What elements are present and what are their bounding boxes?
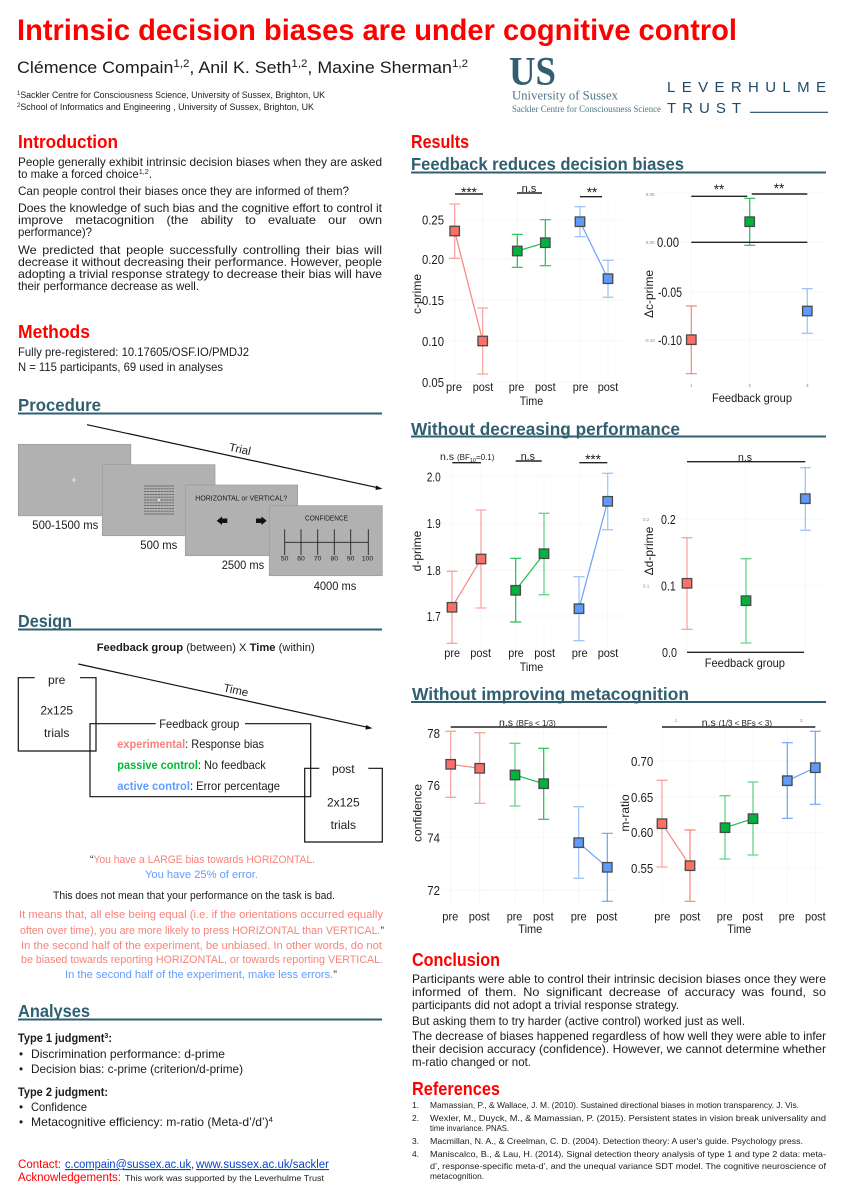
chart: delta d-prime by group: 0.0 [662, 645, 677, 660]
chart: delta c-prime by group: -0.10 [658, 332, 682, 348]
heading: without improving metacognition: Without improving metacognition [412, 684, 689, 704]
chart: confidence pre vs post: pre [571, 910, 587, 924]
chart: d-prime pre vs post: n.s (BF [440, 451, 470, 463]
text: reference list [412, 1100, 827, 1181]
chart: c-prime pre vs post: 0.05 [422, 375, 444, 390]
chart: c-prime pre vs post: n.s [522, 183, 537, 195]
text: feedback wording: “You have a LARGE bias towards HORIZONTAL. [90, 854, 315, 866]
text: contact: www.sussex.ac.uk/sackler [195, 1159, 329, 1171]
text: acknowledgements: Acknowledgements: [18, 1172, 121, 1184]
logo: Leverhulme Trust: TRUST [667, 100, 741, 117]
heading: analyses: Analyses [18, 1001, 90, 1021]
chart: confidence pre vs post: pre [507, 910, 523, 924]
text: feedback wording: be biased towards reporting HORIZONTAL, or towards reporting VERTICAL. [21, 954, 383, 966]
text: type 1 judgment: : [108, 1032, 112, 1045]
text: feedback wording: This does not mean that your performance on the task is bad. [53, 890, 335, 902]
text: methods body: Fully pre-registered: 10.17605/OSF.IO/PMDJ2 [18, 346, 249, 359]
screen: stimulus [102, 465, 215, 552]
chart: m-ratio pre vs post: 0.60 [631, 825, 653, 840]
text: type 1 judgment: Discrimination performance: d-prime [31, 1048, 225, 1061]
chart: m-ratio pre vs post: 3 [800, 718, 803, 723]
chart: c-prime pre vs post: 0.10 [422, 334, 444, 349]
chart: confidence pre vs post: post [596, 910, 618, 924]
text: type 1 judgment: 3 [104, 1031, 108, 1040]
chart: d-prime pre vs post: post [598, 646, 619, 660]
screen: confidence scale: CONFIDENCE [305, 516, 348, 522]
chart: m-ratio pre vs post: 0.65 [631, 790, 653, 805]
chart: delta c-prime by group: 1 [690, 383, 693, 388]
chart: d-prime pre vs post: pre [572, 646, 588, 660]
heading: conclusion: Conclusion [412, 950, 500, 970]
text: feedback wording: In the second half of the experiment, make less errors.” [65, 969, 337, 981]
chart: delta d-prime by group [642, 452, 826, 670]
heading: introduction: Introduction [18, 132, 118, 152]
heading: references: References [412, 1079, 500, 1099]
affiliations: 2 [17, 103, 21, 109]
chart: delta c-prime by group: -0.10 [644, 338, 655, 343]
affiliations: Sackler Centre for Consciousness Science, University of Sussex, Brighton, UK [20, 90, 325, 100]
chart: confidence pre vs post: 76 [427, 778, 440, 793]
text: type 2 judgment [18, 1086, 273, 1129]
chart: d-prime pre vs post: post [534, 646, 556, 660]
chart: confidence pre vs post: 72 [427, 883, 440, 898]
chart: d-prime pre vs post: 2.0 [427, 470, 441, 484]
text: reference list: 1. [412, 1100, 419, 1110]
text: feedback wording: It means that, all else being equal (i.e. if the orientations occurred equally [19, 909, 383, 921]
screen: confidence scale: 60 [297, 556, 305, 562]
panel: analyses [18, 1001, 382, 1129]
text: type 1 judgment: • [19, 1048, 23, 1061]
text: introduction body: improve metacognition (the ability to evaluate our own [18, 214, 382, 227]
chart: c-prime pre vs post: post [598, 380, 619, 394]
text: contact: , [191, 1159, 194, 1171]
heading: methods: Methods [18, 322, 90, 342]
box: post block: trials [331, 818, 356, 832]
box: post block: post [332, 762, 355, 776]
chart: c-prime pre vs post [410, 183, 625, 408]
screen: confidence scale: 50 [281, 556, 289, 562]
box: post block: 2x125 [327, 796, 360, 810]
chart: m-ratio pre vs post: post [680, 910, 701, 924]
text: type 2 judgment: • [19, 1116, 23, 1129]
screen: confidence scale: 80 [331, 556, 338, 562]
authors [17, 58, 468, 77]
chart: confidence pre vs post: Time [518, 922, 543, 936]
text: factorial design: Feedback group (between) X Time (within) [97, 642, 315, 654]
screen: confidence scale: 4000 ms [314, 579, 356, 593]
chart: d-prime pre vs post: pre [444, 646, 460, 660]
screen: confidence scale: 90 [347, 556, 355, 562]
chart: delta c-prime by group: Feedback group [712, 391, 792, 405]
chart: c-prime pre vs post: pre [446, 380, 462, 394]
authors: 1,2 [173, 58, 189, 70]
chart: m-ratio pre vs post: Time [727, 922, 752, 936]
chart: confidence pre vs post: post [533, 910, 554, 924]
text: reference list: Mamassian, P., & Wallace, J. M. (2010). Sustained directional biases in motion transparency. J. Vis. [430, 1100, 799, 1110]
text: conclusion body: their decision accuracy (confidence). However, we cannot determine whether [412, 1043, 826, 1056]
chart: d-prime pre vs post: 1.9 [427, 516, 441, 531]
affiliations [17, 90, 325, 112]
chart: confidence pre vs post: 74 [427, 830, 440, 846]
text: conclusion body [412, 973, 827, 1069]
text: type 1 judgment: Decision bias: c-prime (criterion/d-prime) [31, 1063, 243, 1076]
heading: procedure: Procedure [18, 395, 101, 415]
chart: d-prime pre vs post: post [470, 646, 492, 660]
text: introduction body: to make a forced choice [18, 168, 142, 181]
text: type 1 judgment: • [19, 1063, 23, 1076]
authors: 1,2 [291, 58, 307, 70]
text: feedback wording [19, 854, 384, 981]
heading: design: Design [18, 611, 72, 631]
text: reference list: Maniscalco, B., & Lau, H. (2014). Signal detection theory analysis of type 1 and type 2 data: meta- [430, 1149, 826, 1159]
chart: d-prime pre vs post: 1.8 [427, 563, 441, 578]
chart: delta d-prime by group: Δd-prime [642, 526, 656, 575]
chart: c-prime pre vs post: post [473, 380, 494, 394]
chart: m-ratio pre vs post: post [805, 910, 826, 924]
chart: m-ratio pre vs post: 1 [675, 718, 678, 723]
chart: delta d-prime by group: 0.2 [661, 512, 676, 527]
arrow: time: Time [222, 682, 249, 699]
text: methods body: N = 115 participants, 69 used in analyses [18, 361, 223, 374]
chart: c-prime pre vs post: 0.15 [422, 293, 444, 308]
title: Intrinsic decision biases are under cognitive control [17, 14, 737, 47]
text: type 1 judgment: Type 1 judgment [18, 1032, 110, 1045]
text: introduction body [18, 156, 383, 293]
chart: c-prime pre vs post: post [535, 380, 556, 394]
box: pre block [18, 673, 96, 751]
heading: results: Results [411, 132, 469, 152]
box: pre block: trials [44, 726, 69, 740]
box: feedback group: Feedback group [159, 717, 240, 731]
screen: stimulus: 500 ms [140, 538, 177, 552]
chart: m-ratio pre vs post: n.s (1/3 < BFs < 3) [702, 717, 772, 729]
chart: c-prime pre vs post: c-prime [410, 274, 424, 314]
screen: confidence scale: 100 [362, 556, 373, 562]
text: reference list: d’, response-specific meta-d’, and the unequal variance SDT model. The cognitive neuroscience of [430, 1161, 827, 1171]
text: introduction body: We predicted that people successfully controlling their bias will [18, 244, 382, 257]
chart: delta c-prime by group: 0.00 [646, 240, 655, 245]
text: type 1 judgment [18, 1031, 243, 1076]
chart: delta c-prime by group: ** [774, 181, 785, 196]
text: type 2 judgment: Metacognitive efficiency: m-ratio (Meta-d’/d’) [31, 1116, 260, 1129]
arrow: trial timeline [87, 425, 382, 490]
text: reference list: metacognition. [430, 1171, 484, 1181]
box: pre block: 2x125 [40, 704, 73, 718]
chart: m-ratio pre vs post: pre [654, 910, 671, 924]
text: introduction body: decrease it without decreasing their performance. However, people [18, 256, 382, 269]
chart: delta c-prime by group: -0.05 [658, 284, 682, 300]
text: passive control group: passive control: No feedback [117, 758, 267, 772]
chart: d-prime pre vs post: 10 [470, 458, 476, 464]
chart: c-prime pre vs post: Time [520, 394, 544, 408]
chart: delta c-prime by group [642, 181, 826, 405]
chart: delta c-prime by group: 0.05 [646, 192, 655, 197]
text: conclusion body: The decrease of biases happened regardless of how well they were able to infer [412, 1030, 826, 1043]
affiliations: School of Informatics and Engineering , University of Sussex, Brighton, UK [20, 102, 314, 112]
authors: , Anil K. Seth [189, 58, 291, 77]
panel: design [18, 611, 384, 981]
text: contact: Contact: [18, 1159, 61, 1171]
chart: m-ratio pre vs post: pre [779, 910, 795, 924]
text: introduction body: Does the knowledge of such bias and the cognitive effort to control it [18, 202, 383, 215]
box: post block [305, 762, 382, 842]
text: experimental group: experimental: Response bias [117, 737, 264, 751]
screen: confidence scale [269, 506, 382, 593]
box: pre block: pre [48, 673, 66, 687]
text: introduction body: People generally exhibit intrinsic decision biases when they are asked [18, 156, 382, 169]
text: conclusion body: m-ratio changed or not. [412, 1056, 531, 1069]
chart: d-prime pre vs post: *** [585, 452, 602, 467]
text: reference list: 2. [412, 1113, 419, 1123]
chart: delta c-prime by group: 0.00 [657, 234, 679, 250]
chart: m-ratio pre vs post: m-ratio [618, 794, 632, 832]
arrow: trial timeline: Trial [228, 442, 252, 458]
screen: response prompt [185, 485, 298, 572]
panel: procedure [18, 395, 382, 593]
text: conclusion body: informed of them. No significant decrease of accuracy was found, so [412, 986, 827, 999]
chart: delta c-prime by group: ** [714, 182, 725, 197]
chart: delta d-prime by group: Feedback group [705, 656, 785, 670]
chart: m-ratio pre vs post: 2 [728, 718, 731, 723]
text: active control group: active control: Error percentage [117, 779, 280, 793]
text: conclusion body: participants did not adopt a trivial response strategy. [412, 999, 679, 1012]
chart: d-prime pre vs post: Time [520, 660, 544, 674]
screen: confidence scale: 70 [314, 556, 322, 562]
chart: d-prime pre vs post: pre [508, 646, 524, 660]
text: type 2 judgment: • [19, 1101, 23, 1114]
chart: d-prime pre vs post: d-prime [410, 530, 424, 571]
text: introduction body: performance)? [18, 226, 92, 239]
text: feedback wording: often over time), you are more likely to press HORIZONTAL than VERTICAL.” [20, 925, 384, 937]
text: reference list: Macmillan, N. A., & Creelman, C. D. (2004). Detection theory: A user's guide. Psychology press. [430, 1136, 803, 1146]
chart: delta c-prime by group: 2 [748, 383, 751, 388]
chart: confidence pre vs post: 78 [427, 726, 440, 741]
affiliations: 1 [17, 91, 21, 97]
chart: confidence pre vs post [410, 717, 620, 936]
text: introduction body: . [149, 168, 152, 181]
chart: d-prime pre vs post: n.s [521, 451, 535, 463]
chart: m-ratio pre vs post: 0.55 [631, 861, 653, 876]
text: methods body [18, 346, 249, 374]
logo: Leverhulme Trust [667, 79, 828, 117]
chart: d-prime pre vs post [410, 451, 625, 674]
chart: delta d-prime by group: n.s [738, 452, 752, 464]
text: acknowledgements: This work was supported by the Leverhulme Trust [125, 1173, 325, 1183]
chart: c-prime pre vs post: *** [461, 185, 478, 200]
chart: confidence pre vs post: pre [442, 910, 459, 924]
panel: references [412, 1079, 827, 1181]
chart: d-prime pre vs post: =0.1) [476, 453, 495, 462]
text: conclusion body: But asking them to try harder (active control) worked just as well. [412, 1015, 745, 1028]
text: type 2 judgment: Confidence [31, 1101, 87, 1114]
screen: fixation: 500-1500 ms [32, 518, 98, 532]
text: acknowledgements [18, 1172, 325, 1184]
chart: c-prime pre vs post: ** [587, 185, 598, 200]
text: reference list: Wexler, M., Duyck, M., & Mamassian, P. (2015). Persistent states in vision break universality and [430, 1113, 826, 1123]
logo: University of Sussex: University of Sussex [512, 88, 619, 102]
chart: confidence pre vs post: post [469, 910, 490, 924]
logo: University of Sussex: US [509, 48, 556, 94]
text: introduction body: adopting a trivial response strategy to decrease their bias will have [18, 268, 382, 281]
logo: Leverhulme Trust: LEVERHULME [667, 79, 826, 96]
chart: m-ratio pre vs post [618, 717, 826, 936]
chart: d-prime pre vs post: 1.7 [427, 609, 441, 624]
text: contact [18, 1159, 329, 1171]
chart: confidence pre vs post: confidence [410, 784, 424, 842]
text: reference list: time invariance. PNAS. [430, 1123, 509, 1133]
text: contact: c.compain@sussex.ac.uk [65, 1159, 191, 1171]
text: introduction body: Can people control their biases once they are informed of them? [18, 185, 349, 198]
text: type 2 judgment: 4 [269, 1115, 273, 1124]
chart: c-prime pre vs post: 0.25 [422, 212, 444, 228]
logo: University of Sussex: Sackler Centre for Consciousness Science [512, 104, 661, 114]
screen: response prompt: 2500 ms [222, 558, 264, 572]
arrow: time [78, 664, 373, 730]
chart: confidence pre vs post: n.s (BFs < 1/3) [499, 717, 556, 729]
text: reference list: 3. [412, 1136, 419, 1146]
text: conclusion body: Participants were able to control their intrinsic decision biases once they were [412, 973, 826, 986]
panel: methods [18, 322, 249, 374]
text: type 2 judgment: Type 2 judgment: [18, 1086, 108, 1099]
screen: fixation [18, 444, 131, 532]
chart: c-prime pre vs post: pre [509, 380, 525, 394]
chart: delta c-prime by group: Δc-prime [642, 270, 656, 318]
text: reference list: 4. [412, 1149, 419, 1159]
box: feedback group [90, 717, 311, 797]
chart: m-ratio pre vs post: 0.70 [631, 754, 653, 769]
chart: delta d-prime by group: 0.1 [661, 578, 676, 594]
text: introduction body: their performance decrease as well. [18, 280, 199, 293]
text: feedback wording: In the second half of the experiment, be unbiased. In other words, do not [21, 940, 383, 952]
heading: feedback reduces decision biases: Feedback reduces decision biases [411, 154, 684, 174]
chart: delta d-prime by group: 0.2 [643, 517, 650, 522]
panel: introduction [18, 132, 383, 293]
text: introduction body: 1,2 [139, 167, 149, 176]
logo: University of Sussex [509, 48, 661, 114]
chart: m-ratio pre vs post: pre [717, 910, 733, 924]
authors: Clémence Compain [17, 58, 166, 77]
chart: delta d-prime by group: 0.1 [643, 584, 650, 588]
authors: , Maxine Sherman [307, 58, 452, 77]
authors: 1,2 [452, 58, 468, 70]
screen: response prompt: HORIZONTAL or VERTICAL? [195, 496, 287, 502]
heading: without decreasing performance: Without decreasing performance [411, 419, 680, 439]
chart: c-prime pre vs post: 0.20 [422, 252, 444, 267]
chart: m-ratio pre vs post: post [742, 910, 764, 924]
text: feedback wording: You have 25% of error. [145, 869, 258, 881]
panel: conclusion [412, 950, 827, 1069]
chart: c-prime pre vs post: pre [573, 380, 589, 394]
chart: delta c-prime by group: 3 [806, 383, 809, 388]
